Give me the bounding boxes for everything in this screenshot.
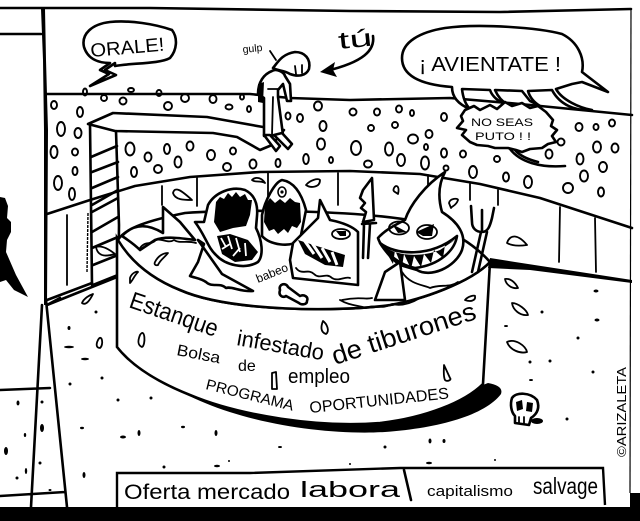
caption box: labora xyxy=(300,477,401,502)
text: estanque: Estanque xyxy=(126,287,222,343)
babeo label: babeo xyxy=(254,260,290,286)
speech bubble: avientate xyxy=(402,26,608,110)
skull xyxy=(511,394,543,425)
tu label and arrow: tú xyxy=(337,25,373,55)
text: empleo: empleo xyxy=(288,366,350,388)
floor specks xyxy=(4,290,600,491)
gulp label: gulp xyxy=(242,42,263,56)
shark: left fin and body xyxy=(122,207,253,291)
pool front wall and water xyxy=(47,211,632,433)
figure on the board xyxy=(258,51,309,151)
text: bolsa de empleo: Bolsa xyxy=(175,342,222,367)
spiky bubble: no seas puto xyxy=(457,102,565,166)
spiky bubble: no seas puto: NO SEAS xyxy=(471,117,533,129)
shark: toothy profile xyxy=(290,200,358,285)
wall bubbles xyxy=(50,88,618,200)
shark: wide open mouth xyxy=(195,189,262,266)
bone xyxy=(280,284,307,304)
text: programa: PROGRAMA xyxy=(204,376,295,415)
caption box: salvage xyxy=(533,473,598,499)
shark: big with dorsal fin xyxy=(340,172,463,308)
shark group xyxy=(122,172,494,308)
spiky bubble: no seas puto: PUTO ! ! xyxy=(475,131,531,143)
text: infestado: infestado xyxy=(235,325,326,365)
speech bubble: orale: ORALE! xyxy=(90,35,165,62)
diving board and ladder xyxy=(88,113,284,310)
text: de tiburones: de tiburones xyxy=(328,296,480,371)
caption: capitalismo salvage: capitalismo xyxy=(427,483,513,500)
speech bubble: avientate: ¡ AVIENTATE ! xyxy=(419,54,561,76)
back wall of the pool enclosure xyxy=(47,171,632,305)
tu label and arrow xyxy=(320,25,373,77)
shark: centre back xyxy=(262,180,306,245)
caption: oferta mercado laboral: Oferta mercado xyxy=(124,481,290,504)
signature: ©ARIZALETA xyxy=(614,367,629,457)
pool label text xyxy=(126,287,480,417)
text: de: de xyxy=(238,358,256,375)
caption box xyxy=(117,468,605,507)
water droplets xyxy=(82,178,528,389)
knife xyxy=(360,178,376,258)
speech bubble: orale xyxy=(84,21,176,86)
text: oportunidades: OPORTUNIDADES xyxy=(309,385,450,417)
left neighbouring panel fragment xyxy=(0,197,67,507)
wall horizon line xyxy=(47,94,632,115)
fork xyxy=(471,206,494,272)
